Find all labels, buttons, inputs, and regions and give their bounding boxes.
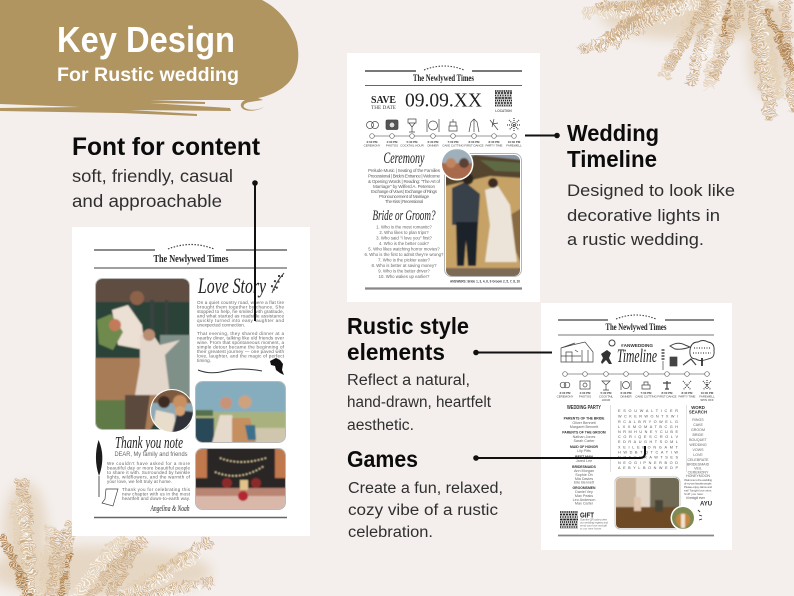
timeline times and labels: CAKE CUTTING — [442, 144, 465, 148]
icon: cupid — [270, 358, 284, 375]
masthead — [94, 244, 287, 268]
text block: font for content: and approachable — [72, 191, 222, 211]
photo: couple walking in field — [445, 154, 522, 277]
text block: bride or groom questions: 2. Who likes to plan trips? — [379, 230, 429, 235]
icon: figure with bag — [601, 340, 615, 364]
label: hashtag: #ANWEDDING — [621, 343, 653, 348]
timeline times and labels: CEREMONY — [557, 394, 573, 398]
timeline times and labels: 3:00 PM — [367, 140, 378, 144]
photo: rustic feet in autumn leaves — [615, 477, 680, 529]
word search grid: NEOGIPNERBOD — [618, 461, 678, 465]
word search list: BOUQUET — [689, 438, 708, 442]
heading: Ceremony: Ceremony — [384, 150, 425, 167]
text block: thank you paragraphs: Thank you for celebrating this — [122, 487, 191, 492]
word search list: VOWS — [693, 448, 704, 452]
timeline times and labels: FAREWELL — [699, 394, 715, 398]
text block: love story paragraphs: love, laughter, and the magic of perfect — [197, 354, 285, 358]
timeline times and labels: 8:00 PM — [469, 140, 480, 144]
text block: wedding timeline — [567, 120, 735, 249]
wedding party list: Leo Anderson — [573, 498, 595, 502]
word search list: HONEYMOON — [686, 474, 710, 478]
text block: note from ayu: Sniff you later. — [684, 492, 704, 496]
text block: ceremony order: Exchange of Vows | Exchange of Rings — [371, 189, 438, 194]
text block: font for content — [72, 133, 261, 211]
connector: font for content — [252, 180, 258, 321]
text block: games: Games — [347, 446, 418, 472]
text block: font for content: soft, friendly, casual — [72, 166, 233, 186]
signature: Angelina & Noah — [150, 503, 190, 513]
photo: circular couple portrait — [440, 148, 474, 180]
timeline times and labels: 5:30 PM — [601, 391, 612, 395]
photo: dog portrait — [670, 506, 694, 529]
timeline times and labels: FAREWELL — [506, 144, 522, 148]
bottom rule — [365, 287, 522, 290]
timeline times and labels: PHOTOS — [579, 394, 591, 398]
heading: Key Design: Key Design — [57, 19, 235, 60]
wedding party list: PARENTS OF THE GROOM — [562, 430, 606, 434]
photo: couple by river — [95, 278, 190, 430]
photo: string lights dinner — [195, 448, 286, 510]
word search grid: WCKERWONTXWI — [618, 414, 678, 418]
panel: timeline and word search page — [541, 303, 732, 550]
heading: Bride or Groom?: Bride or Groom? — [372, 208, 436, 224]
text block: games — [347, 446, 503, 541]
wedding party list: Max Carter — [575, 502, 594, 506]
text block: games: cozy vibe of a rustic — [348, 502, 498, 519]
text block: bride or groom questions: 9. Who is the better driver? — [378, 268, 430, 274]
wedding party list: Mia Davies — [575, 477, 593, 481]
wedding party list: Margaret Bennett — [570, 425, 598, 429]
icon: wag marks — [698, 510, 702, 520]
text block: wedding timeline: Timeline — [567, 146, 657, 172]
text block: thank you paragraphs: to share it with. Surrounded by twinkle — [107, 470, 190, 475]
text block: thank you paragraphs: heartfelt and down-to-earth way. — [122, 496, 190, 501]
save the date — [371, 90, 483, 112]
text block: love story paragraphs: their greatest journey — one paved with — [197, 349, 284, 354]
wedding party list: MAID OF HONOR — [570, 445, 598, 449]
heading: Timeline: Timeline — [617, 346, 657, 367]
timeline times and labels: FIRST DANCE — [657, 394, 677, 398]
text block: gift — [580, 510, 608, 530]
text block: thank you paragraphs: lights, wildflowers, and the warmth of — [107, 474, 191, 480]
timeline times and labels: CAKE CUTTING — [635, 394, 658, 398]
text block: love story paragraphs: unexpected connection. — [197, 322, 245, 328]
label: AYU: AYU — [700, 502, 712, 508]
text block: gift: GIFT — [580, 510, 594, 520]
text block: gift: to our new home. — [580, 526, 602, 530]
heading: Love Story: Love Story — [197, 273, 266, 298]
word search list: GROOM — [691, 428, 705, 432]
text block: rustic style elements: Rustic style — [347, 313, 469, 339]
timeline times and labels: DINNER — [427, 144, 439, 148]
timeline track — [563, 372, 710, 376]
word search list: VEIL — [694, 466, 702, 470]
timeline times and labels: PARTY TIME — [486, 144, 503, 148]
text block: note from ayu: eat! Tonight love wins. — [684, 488, 712, 492]
timeline times and labels: 7:00 PM — [448, 140, 459, 144]
connector: rustic style elements — [473, 350, 552, 355]
word search list: BRIDE — [693, 433, 704, 437]
text block: love story paragraphs: quickly turned into easy laughter and — [197, 318, 284, 323]
timeline times and labels: CEREMONY — [364, 144, 380, 148]
word search grid — [618, 409, 679, 470]
timeline times and labels: SPIN OFF — [700, 398, 714, 402]
text block: love story paragraphs: On a quiet country road, where a flat tire — [197, 300, 284, 305]
text block: love story paragraphs: nearby diner, talking like old friends over — [197, 336, 284, 340]
timeline times and labels: PARTY TIME — [679, 394, 696, 398]
panel: wedding timeline page — [347, 53, 540, 302]
wedding party list: Elle Bennett — [574, 480, 594, 484]
word search grid: RCALBRYOWELG — [618, 420, 678, 424]
word search list: CAKE — [693, 423, 703, 427]
wedding party list: BRIDESMAIDS — [572, 465, 597, 469]
text block: bride or groom questions: 5. Who likes watching horror movies? — [368, 246, 440, 252]
text block: love story paragraphs: wine. From that spontaneous moment, a — [197, 340, 284, 345]
panel: newspaper love story page — [72, 227, 310, 536]
word search list: WORD — [691, 405, 705, 410]
word search grid: NRMHUNEYCUBE — [618, 430, 678, 434]
text block: thank you paragraphs: We couldn't have asked for a more — [107, 461, 190, 466]
text block: ceremony order: The Kiss | Recessional — [385, 199, 423, 204]
connector: games — [473, 446, 645, 461]
wedding party list: Max Peaks — [575, 494, 593, 498]
icon: leaf sprig — [271, 273, 284, 293]
text block: thank you paragraphs: new chapter with us in the most — [122, 492, 191, 496]
text block: wedding timeline: decorative lights in — [567, 206, 720, 225]
divider flourish — [198, 369, 262, 373]
text block: bride or groom questions: 3. Who said "I love you" first? — [376, 236, 433, 240]
icon: tree — [690, 340, 714, 366]
text block: thank you paragraphs: your love, we felt truly at home. — [107, 479, 172, 484]
timeline times and labels — [557, 391, 715, 402]
word search list: BRIDESMAID — [687, 462, 710, 466]
word search grid: NOTUYRAWTSES — [618, 456, 678, 460]
text block: font for content: Font for content — [72, 133, 261, 161]
wedding party list: Sophie Oh — [575, 473, 593, 477]
text block: wedding timeline: Designed to look like — [567, 181, 735, 200]
timeline times and labels: 10:30 PM — [701, 391, 714, 395]
bottom rule — [94, 516, 287, 518]
text block: love story paragraphs: and what started as roadside assistance — [197, 314, 284, 318]
text block: bride or groom questions: 8. Who is better at saving money? — [372, 263, 437, 268]
masthead — [558, 315, 714, 335]
masthead: The Newlywed Times — [154, 254, 229, 265]
text block: note from ayu — [684, 478, 712, 500]
timeline times and labels: COCKTAIL HOUR — [400, 144, 424, 148]
text block: gift: our wedding registry and — [580, 520, 608, 524]
timeline times and labels: 4:00 PM — [387, 140, 398, 144]
header brush banner — [0, 0, 298, 116]
word search list: WEDDING — [689, 443, 707, 447]
wedding party list: PARENTS OF THE BRIDE — [564, 416, 605, 420]
wedding party list: Sarah Carter — [573, 439, 595, 443]
text block: love story paragraphs: timing. — [197, 358, 211, 363]
text block: note from ayu: of my two favorite people. — [684, 482, 712, 486]
text block: ceremony order: Processional | Bride's Entrance | Welcome — [368, 174, 440, 178]
text block: love story paragraphs: simple detour became the beginning of — [197, 344, 285, 350]
text block: games: celebration. — [348, 524, 433, 541]
word search grid: ESOUWALTICER — [618, 409, 678, 413]
timeline times and labels: 7:00 PM — [641, 391, 652, 395]
decoration: pampas grass top right — [578, 0, 794, 118]
wedding party list: Ann Morgan — [574, 469, 594, 473]
masthead: The Newlywed Times — [413, 74, 474, 84]
brush shape — [0, 0, 298, 116]
word search grid: HWDBTQTCATIW — [618, 450, 678, 454]
text block: love story paragraphs: brought them together by chance. She — [197, 304, 284, 310]
timeline times and labels — [364, 140, 522, 148]
answers line: ANSWERS: Bride 1, 3, 4, 6, 9 Groom 2, 5, 7, 8, 10 — [450, 280, 520, 284]
timeline times and labels: 8:00 PM — [662, 391, 673, 395]
text block: bride or groom questions — [365, 224, 444, 279]
word search grid: CORIQESCROLV — [618, 435, 678, 439]
timeline times and labels: COCKTAIL — [599, 394, 614, 398]
word search list: RINGS — [692, 418, 704, 422]
timeline times and labels: HOUR — [602, 398, 610, 402]
text block: bride or groom questions: 10. Who wakes up earlier? — [379, 274, 430, 279]
photo: couple in car — [195, 381, 286, 443]
text block: wedding timeline: a rustic wedding. — [567, 230, 704, 249]
text block: note from ayu: Please enjoy, dance and — [684, 485, 712, 489]
timeline times and labels: PHOTOS — [386, 144, 398, 148]
text block: rustic style elements: Reflect a natural, — [347, 372, 470, 389]
text block: rustic style elements: aesthetic. — [347, 417, 414, 434]
text block: greeting: DEAR, My family and friends — [114, 451, 188, 458]
timeline times and labels: 3:00 PM — [560, 391, 571, 395]
timeline track — [370, 134, 516, 138]
word search grid: XEILEBONGAMT — [618, 446, 679, 450]
wedding party list: Lily Pitts — [577, 449, 591, 453]
photo: circular kiss portrait — [150, 389, 194, 433]
wedding party list: WEDDING PARTY — [567, 405, 601, 411]
text block: bride or groom questions: 7. Who is the pickier eater? — [378, 258, 431, 262]
timeline times and labels: 6:30 PM — [621, 391, 632, 395]
masthead — [365, 66, 522, 86]
text block: gift: Scan the QR code to view — [580, 518, 608, 522]
timeline times and labels: 8:30 PM — [489, 140, 500, 144]
icons: timeline events — [560, 380, 711, 390]
qr code: location — [495, 90, 512, 113]
text block: ceremony order: Marriage" by Wilferd A. Peterson — [373, 184, 435, 189]
timeline times and labels: DINNER — [620, 394, 632, 398]
word search grid: EDRAUGHTSOML — [618, 440, 678, 444]
word search list: CELEBRATE — [687, 458, 709, 462]
text block: love story paragraphs: stopped to help, he smiled with gratitude, — [197, 309, 284, 314]
text block: ceremony order: Prelude Music | Seating of the Families — [368, 168, 441, 173]
icons: timeline events — [366, 118, 521, 132]
text block: ceremony order: & Opening Words | Reading: "The Art of — [368, 179, 441, 184]
qr code: location: LOCATION — [495, 109, 512, 113]
word search grid: AEBYLBONWEDP — [618, 466, 678, 470]
save the date: SAVE — [371, 95, 396, 106]
heading: Thank you note: Thank you note — [115, 433, 183, 452]
word search grid: LXXMOMATBCGH — [618, 425, 678, 429]
text block: rustic style elements — [347, 313, 492, 434]
word search list: CEREMONY — [688, 470, 709, 474]
text block: wedding timeline: Wedding — [567, 120, 659, 146]
timeline times and labels: 4:00 PM — [580, 391, 591, 395]
text block: note from ayu: Welcome to the wedding — [684, 478, 712, 482]
text block: ceremony order: Pronouncement of Marriage — [379, 194, 429, 199]
text block: ceremony order — [368, 168, 441, 204]
wedding party list: Daniel Vey — [575, 490, 593, 494]
text block: rustic style elements: hand-drawn, heartfelt — [347, 394, 492, 411]
text block: bride or groom questions: 4. Who is the better cook? — [379, 241, 430, 246]
save the date: THE DATE — [371, 105, 397, 111]
wedding party list: Nathan Jones — [573, 435, 596, 439]
text block: love story paragraphs: That evening, they shared dinner at a — [197, 331, 284, 336]
timeline times and labels: 8:30 PM — [682, 391, 693, 395]
icon: wheat and hat — [663, 343, 696, 370]
save the date: 09.09.XX — [405, 90, 483, 112]
text block: love story paragraphs — [197, 300, 285, 363]
subheading: For Rustic wedding: For Rustic wedding — [57, 65, 239, 86]
icon: scroll — [102, 489, 118, 506]
text block: thank you paragraphs — [107, 461, 191, 501]
wedding party list: Jared Lee — [576, 459, 592, 463]
wedding party list: GROOMSMEN — [573, 486, 596, 490]
icon: barn — [561, 342, 593, 362]
timeline times and labels: 10:30 PM — [508, 140, 521, 144]
word search list: SEARCH — [689, 410, 707, 414]
text block: bride or groom questions: 6. Who is the first to admit they're wrong? — [365, 252, 444, 257]
timeline times and labels: FIRST DANCE — [464, 144, 484, 148]
decoration: pampas grass bottom left — [0, 478, 214, 596]
wedding party list: Oliver Bennett — [572, 421, 596, 425]
text block: gift: send your love and gift — [580, 524, 607, 528]
bottom rule — [558, 534, 714, 536]
qr code: gift — [560, 511, 578, 529]
text block: note from ayu: # bestgirl ever — [686, 496, 706, 500]
timeline times and labels: 5:30 PM — [407, 140, 418, 144]
word search list: LOVE — [693, 453, 703, 457]
connector: wedding timeline — [525, 133, 560, 138]
text block: bride or groom questions: 1. Who is the most romantic? — [376, 224, 432, 230]
icon: quill feather — [96, 440, 102, 497]
wedding party list: BEST MAN — [575, 455, 593, 459]
text block: rustic style elements: elements — [347, 339, 445, 365]
text block: games: Create a fun, relaxed, — [348, 480, 503, 497]
text block: thank you paragraphs: beautiful day or more beautiful people — [107, 466, 190, 470]
timeline times and labels: 6:30 PM — [428, 140, 439, 144]
masthead: The Newlywed Times — [606, 323, 667, 333]
word search list — [686, 405, 710, 478]
wedding party list — [562, 405, 606, 506]
